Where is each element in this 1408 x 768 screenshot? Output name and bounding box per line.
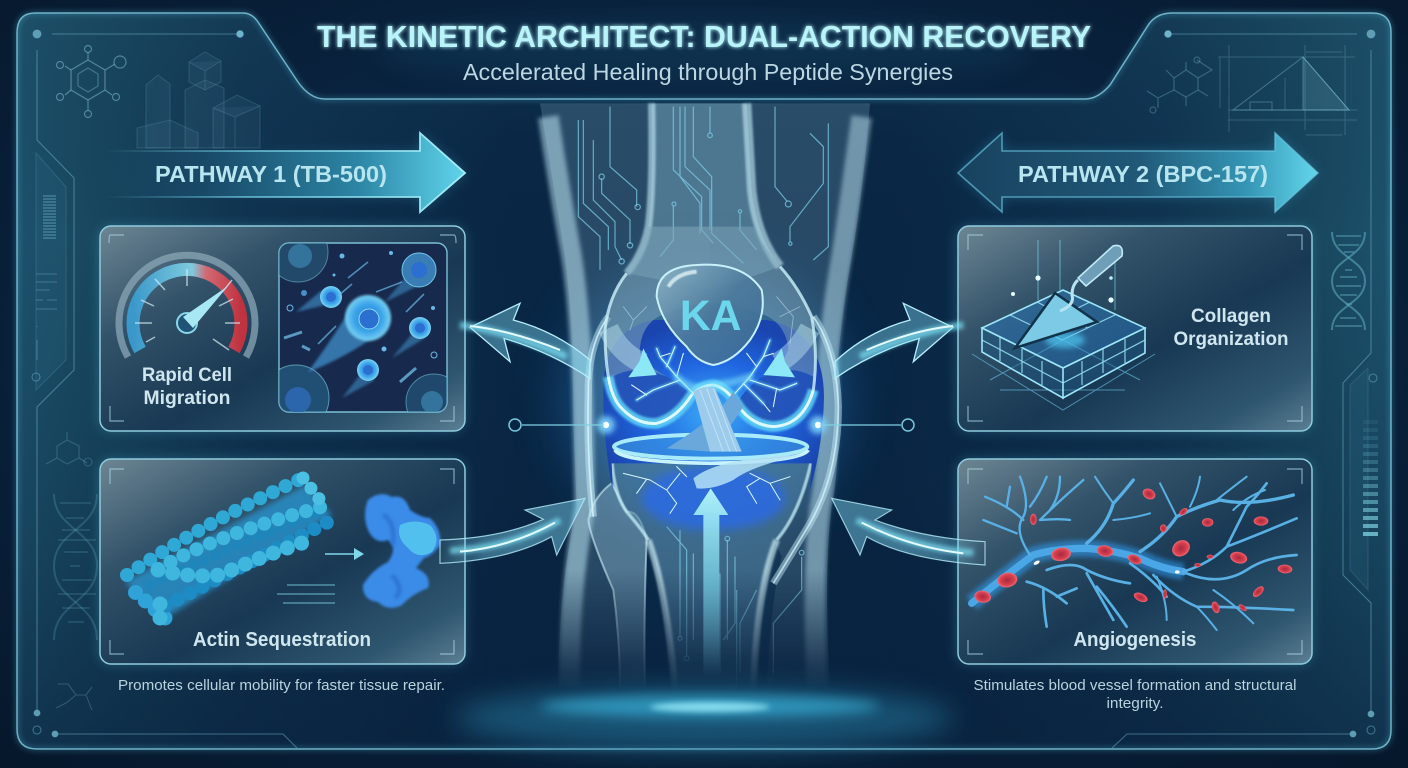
patella with KA logo (657, 265, 763, 365)
inner arrow left (608, 328, 657, 377)
gap between fibula and tibia (646, 540, 668, 659)
joint aura (574, 275, 834, 525)
data ticks (277, 585, 335, 603)
arrow: pathway 2 (958, 133, 1318, 212)
card: rapid cell migration (99, 222, 465, 431)
description: pathway 1: Promotes cellular mobility for faster tissue repair. (118, 678, 445, 694)
capsule (588, 317, 838, 583)
description: pathway 2: Stimulates blood vessel formation and structural (974, 678, 1296, 694)
fibula (588, 483, 647, 690)
status bars right (1363, 420, 1378, 536)
marker right (809, 416, 914, 434)
icon: sequestered protein (363, 494, 440, 608)
blue chamber (603, 320, 824, 490)
arrow: card 2 to knee (440, 498, 585, 563)
label: rapid cell migration: Migration (144, 388, 230, 409)
cruciate ligaments (667, 387, 803, 489)
title: THE KINETIC ARCHITECT: DUAL-ACTION RECOVERY (317, 19, 1091, 54)
label: rapid cell migration: Rapid Cell (142, 365, 232, 386)
tibia (614, 464, 810, 660)
frame circuit lines left (32, 30, 297, 748)
card: actin sequestration (99, 459, 465, 664)
arrow: card 3 to knee (835, 303, 963, 378)
joint core (588, 227, 838, 677)
icon: molecules lower left (46, 432, 92, 710)
icon: molecule top right (1147, 57, 1212, 113)
inner arrow right (763, 328, 810, 377)
pathway 1 label: PATHWAY 1 (TB-500) (155, 161, 387, 187)
label: collagen organization: Collagen (1191, 306, 1271, 327)
description: pathway 2: integrity. (1106, 696, 1164, 712)
circuit traces (578, 107, 828, 690)
femur condyles (605, 227, 815, 427)
inner arrow up (693, 488, 728, 677)
subtitle: Accelerated Healing through Peptide Synergies (463, 59, 953, 85)
frame circuit lines right (1112, 30, 1377, 748)
icon: actin filament (125, 478, 332, 618)
icon: trowel on bricks (972, 240, 1155, 410)
veins (623, 297, 800, 412)
arrow: pathway 1 (105, 133, 465, 212)
icon: blueprint triangle (1218, 45, 1357, 135)
patella with KA logo: KA (680, 292, 741, 340)
card: collagen organization (957, 226, 1312, 431)
marker left (509, 416, 615, 434)
tibial plateau (614, 435, 808, 530)
label: actin sequestration: Actin Sequestration (193, 629, 371, 651)
icon: DNA helix right (1332, 232, 1365, 330)
label: collagen organization: Organization (1174, 329, 1288, 350)
icon: faint crystal towers (137, 52, 260, 148)
knee illustration (509, 103, 914, 690)
icon: DNA helix left (54, 494, 97, 640)
card: angiogenesis (957, 459, 1312, 664)
bottom glow (540, 695, 880, 717)
arrow: actin to protein (325, 548, 364, 560)
arrow: card 1 to knee (460, 303, 590, 378)
icon: branching blood vessels (972, 477, 1297, 630)
pathway 2 label: PATHWAY 2 (BPC-157) (1018, 161, 1268, 187)
migrating cells panel (278, 242, 448, 413)
icon: molecule top left (56, 46, 126, 118)
arrow: card 4 to knee (832, 498, 985, 565)
icon: speed gauge (119, 255, 255, 357)
label: angiogenesis: Angiogenesis (1074, 629, 1196, 651)
transparent leg (540, 103, 870, 690)
